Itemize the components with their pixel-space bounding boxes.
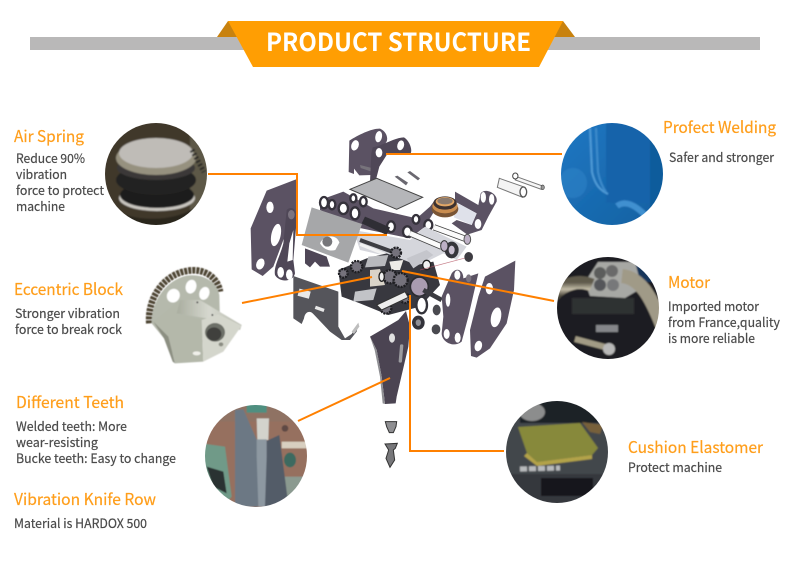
callout: cushion elastomer: Cushion Elastomer xyxy=(628,434,764,458)
callout: air spring: force to protect xyxy=(16,180,104,199)
callout: air spring: Reduce 90% xyxy=(16,148,85,167)
callout: eccentric block xyxy=(14,276,123,338)
top link band xyxy=(320,192,435,238)
part: top cover plate xyxy=(350,178,423,209)
light interior xyxy=(353,227,467,267)
part: angled grey plate xyxy=(302,207,362,267)
callout: motor xyxy=(668,269,780,347)
photo: air spring xyxy=(105,123,207,225)
callout: vibration knife row: Material is HARDOX 500 xyxy=(14,513,147,532)
title banner xyxy=(30,21,760,67)
callout: different teeth xyxy=(16,389,176,467)
callout: eccentric block: Eccentric Block xyxy=(14,276,123,300)
callout: air spring: Air Spring xyxy=(14,123,84,147)
photo: eccentric block xyxy=(149,270,242,363)
exploded machine diagram xyxy=(251,129,544,280)
part: right top bracket xyxy=(452,191,497,235)
callout: profect welding xyxy=(663,114,776,166)
callout: motor: from France,quality xyxy=(668,312,780,331)
callout: vibration knife row xyxy=(14,486,156,532)
part: small bolts xyxy=(395,171,420,185)
title: PRODUCT STRUCTURE xyxy=(266,23,531,59)
machine front parts xyxy=(293,196,515,467)
callout: different teeth: Welded teeth: More xyxy=(16,416,127,435)
callout: cushion elastomer: Protect machine xyxy=(628,457,722,476)
part: top rear bracket xyxy=(349,129,387,175)
photo: profect welding xyxy=(561,123,663,225)
callout: eccentric block: Stronger vibration xyxy=(15,303,120,322)
callout: motor: is more reliable xyxy=(668,328,755,347)
part: right links and washers xyxy=(412,252,478,344)
callout: different teeth: wear-resisting xyxy=(16,432,98,451)
callout: air spring xyxy=(14,123,104,215)
photo: different teeth xyxy=(205,405,307,507)
callout: profect welding: Profect Welding xyxy=(663,114,776,138)
callout: cushion elastomer xyxy=(628,434,764,476)
callout: different teeth: Bucke teeth: Easy to change xyxy=(16,448,176,467)
part: right side plate xyxy=(470,261,515,358)
leader lines xyxy=(208,154,562,451)
callout: motor: Imported motor xyxy=(668,296,759,315)
part: teeth bolts xyxy=(385,422,397,467)
dark gear mass xyxy=(338,248,470,315)
callout: motor: Motor xyxy=(668,269,711,293)
part: left side plate xyxy=(251,179,297,280)
callout: vibration knife row: Vibration Knife Row xyxy=(14,486,156,510)
callout: air spring: vibration xyxy=(16,164,67,183)
central roller and gear assembly xyxy=(320,192,471,315)
callout: eccentric block: force to break rock xyxy=(15,319,122,338)
part: vibration knife xyxy=(370,311,410,404)
photo: motor xyxy=(557,257,659,359)
white rollers xyxy=(360,227,471,258)
photo: cushion elastomer xyxy=(506,401,608,503)
part: top front bracket xyxy=(370,137,411,182)
part: orange air spring xyxy=(432,196,458,217)
callout: different teeth: Different Teeth xyxy=(16,389,124,413)
part: lower left frame xyxy=(293,276,359,340)
part: top right pins xyxy=(497,173,544,197)
callout: air spring: machine xyxy=(16,196,65,215)
callout: profect welding: Safer and stronger xyxy=(669,147,774,166)
